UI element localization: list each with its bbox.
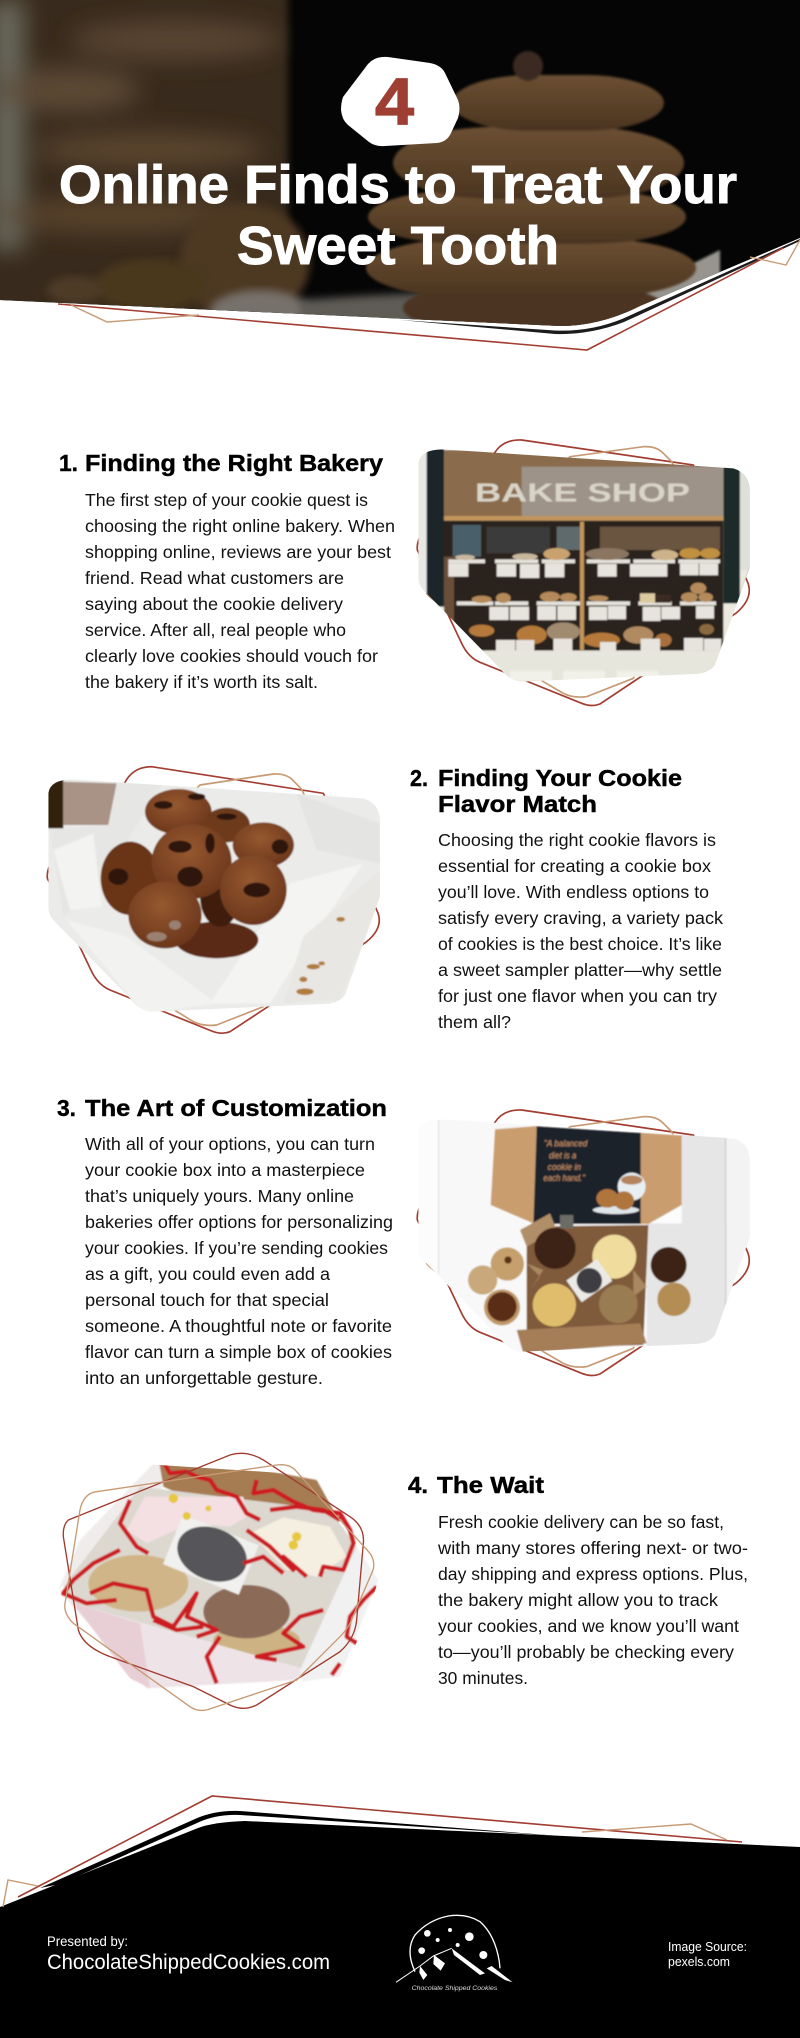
section 3 text: as a gift, you could even add a	[85, 1264, 330, 1284]
bottom sill	[482, 650, 684, 651]
section 1 text: choosing the right online bakery. When	[85, 516, 395, 536]
section 1 text: The first step of your cookie quest is	[85, 490, 368, 510]
price tags	[448, 563, 721, 651]
sticker	[163, 1514, 259, 1595]
section 3 text: flavor can turn a simple box of cookies	[85, 1342, 392, 1362]
quote on box lid	[543, 1139, 588, 1183]
section 1 text: service. After all, real people who	[85, 620, 346, 640]
section 1 heading: Finding the Right Bakery	[85, 450, 383, 476]
section 2 text: essential for creating a cookie box	[438, 856, 711, 876]
sprinkles	[169, 1494, 301, 1550]
title	[59, 155, 737, 276]
section 1 text	[85, 490, 395, 692]
plates	[448, 559, 720, 605]
section 4 text	[437, 1512, 748, 1688]
cookies in box	[534, 1228, 576, 1269]
section 4 text: Fresh cookie delivery can be so fast,	[438, 1512, 724, 1532]
section 1 text: friend. Read what customers are	[85, 568, 344, 588]
section 2 text: Choosing the right cookie flavors is	[438, 830, 716, 850]
footer presented by: Presented by:	[47, 1934, 128, 1949]
red shred	[63, 1462, 377, 1683]
section 2 heading: Finding Your Cookie	[438, 765, 682, 791]
blurred jar of cookies	[0, 0, 288, 350]
section 3 text: that’s uniquely yours. Many online	[85, 1186, 354, 1206]
section 3 text: personal touch for that special	[85, 1290, 329, 1310]
title: Sweet Tooth	[237, 216, 559, 276]
section 1 text: the bakery if it’s worth its salt.	[85, 672, 318, 692]
section 3 text: someone. A thoughtful note or favorite	[85, 1316, 392, 1336]
image: gift box with red shred	[58, 1453, 378, 1710]
section 2 text: of cookies is the best choice. It’s like	[438, 934, 722, 954]
footer image source: pexels.com	[668, 1955, 730, 1969]
section 2 text: a sweet sampler platter—why settle	[438, 960, 722, 980]
footer presented by	[47, 1934, 330, 1974]
title: Online Finds to Treat Your	[59, 155, 737, 215]
header curved accent lines	[58, 239, 800, 350]
section 2 text	[438, 830, 723, 1032]
cookies beside box	[491, 1247, 524, 1281]
quote on box lid: diet is a	[549, 1150, 576, 1160]
section 4 text: day shipping and express options. Plus,	[438, 1564, 748, 1584]
section 2 text: them all?	[438, 1012, 511, 1032]
blurred foreground cookies	[47, 204, 720, 340]
section 2 text: satisfy every craving, a variety pack	[438, 908, 723, 928]
section 3 text: into an unforgettable gesture.	[85, 1368, 323, 1388]
section 3 text: your cookies. If you’re sending cookies	[85, 1238, 388, 1258]
footer logo: Chocolate Shipped Cookies	[412, 1985, 498, 1992]
section 4 text: your cookies, and we know you’ll want	[438, 1616, 739, 1636]
section 2 text: for just one flavor when you can try	[438, 986, 717, 1006]
section 4 heading: The Wait	[437, 1472, 544, 1498]
section 3 text: your cookie box into a masterpiece	[85, 1160, 365, 1180]
footer image source: Image Source:	[668, 1940, 747, 1954]
section 3 text	[85, 1134, 393, 1388]
section 3 heading: The Art of Customization	[85, 1095, 387, 1121]
section 3 text: With all of your options, you can turn	[85, 1134, 375, 1154]
footer presented by: ChocolateShippedCookies.com	[47, 1950, 330, 1974]
section 4 text: to—you’ll probably be checking every	[438, 1642, 734, 1662]
section 4 text: 30 minutes.	[438, 1668, 528, 1688]
badge: number 4	[341, 57, 460, 146]
stacked cookies	[366, 51, 696, 328]
decorative outlines in front of photo	[63, 1453, 363, 1708]
section 1 text: shopping online, reviews are your best	[85, 542, 391, 562]
cookies	[175, 922, 258, 958]
section 3 text: bakeries offer options for personalizing	[85, 1212, 393, 1232]
section 2 heading: 2.	[410, 765, 428, 791]
footer logo	[396, 1915, 513, 1992]
sticker	[566, 1259, 612, 1302]
box lid and sides	[158, 1465, 334, 1511]
section 2 text: you’ll love. With endless options to	[438, 882, 709, 902]
header photo: cookie stack	[0, 0, 800, 350]
section 3 heading: 3.	[57, 1095, 76, 1121]
image: bake shop window	[417, 440, 753, 706]
section 4 heading: 4.	[408, 1472, 428, 1498]
section 2 heading: Flavor Match	[438, 791, 597, 817]
crumbs	[296, 917, 345, 995]
image: open cookie gift box	[417, 1110, 753, 1376]
badge: number 4: 4	[375, 64, 414, 138]
section 2 heading	[410, 765, 682, 817]
sign lettering: BAKE SHOP	[475, 478, 690, 508]
section 1 heading: 1.	[59, 450, 78, 476]
footer black panel	[0, 1796, 800, 2038]
quote on box lid: each hand."	[543, 1173, 586, 1183]
quote on box lid: cookie in	[548, 1162, 581, 1172]
shredded paper	[527, 1225, 648, 1348]
section 4 text: the bakery might allow you to track	[438, 1590, 718, 1610]
pastries	[455, 548, 720, 647]
footer image source	[668, 1940, 747, 1969]
image: chocolate cookies on white paper	[47, 767, 383, 1033]
section 4 text: with many stores offering next- or two-	[437, 1538, 748, 1558]
section 1 text: clearly love cookies should vouch for	[85, 646, 378, 666]
section 1 text: saying about the cookie delivery	[85, 594, 343, 614]
quote on box lid: "A balanced	[544, 1139, 588, 1149]
